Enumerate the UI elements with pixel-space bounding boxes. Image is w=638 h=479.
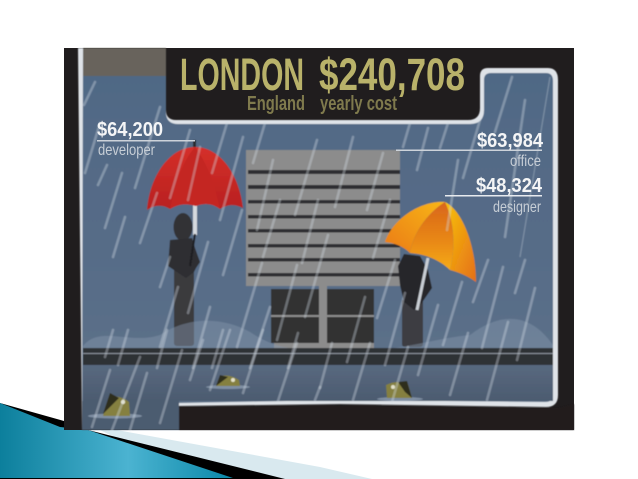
umbrella: red: [147, 140, 243, 235]
label: developer cost: $64,200: [97, 119, 163, 141]
road: [83, 348, 553, 365]
fish: [206, 375, 250, 389]
label: office cost: office: [510, 153, 541, 170]
title: LONDON and yearly cost: yearly cost: [320, 93, 397, 115]
person: developer with red umbrella: [147, 140, 243, 346]
title: LONDON and yearly cost: [180, 49, 465, 115]
title: LONDON and yearly cost: LONDON: [180, 49, 304, 100]
panel: London infographic: [64, 48, 574, 430]
white frame: [78, 48, 558, 430]
rainy sky background: [82, 48, 553, 430]
grey-brown top block: [83, 48, 166, 76]
label: designer cost: designer: [493, 199, 542, 216]
rain streaks: [84, 77, 535, 430]
label: designer cost: $48,324: [476, 175, 543, 197]
umbrella: orange: [385, 202, 476, 282]
label: developer cost: [97, 119, 195, 159]
background hills: [83, 319, 553, 350]
fish: [88, 393, 142, 418]
water: [83, 365, 553, 401]
label: designer cost: [445, 175, 543, 216]
label: office cost: [396, 130, 544, 170]
decorative corner: teal wedge: [0, 403, 372, 479]
title: LONDON and yearly cost: $240,708: [319, 49, 465, 100]
label: office cost: $63,984: [477, 130, 544, 152]
fish: [377, 381, 423, 401]
label: developer cost: developer: [98, 142, 156, 159]
building: [246, 150, 400, 348]
black bottom block: [179, 404, 574, 430]
person: designer with orange umbrella: [385, 202, 476, 347]
title: LONDON and yearly cost: England: [247, 93, 305, 115]
